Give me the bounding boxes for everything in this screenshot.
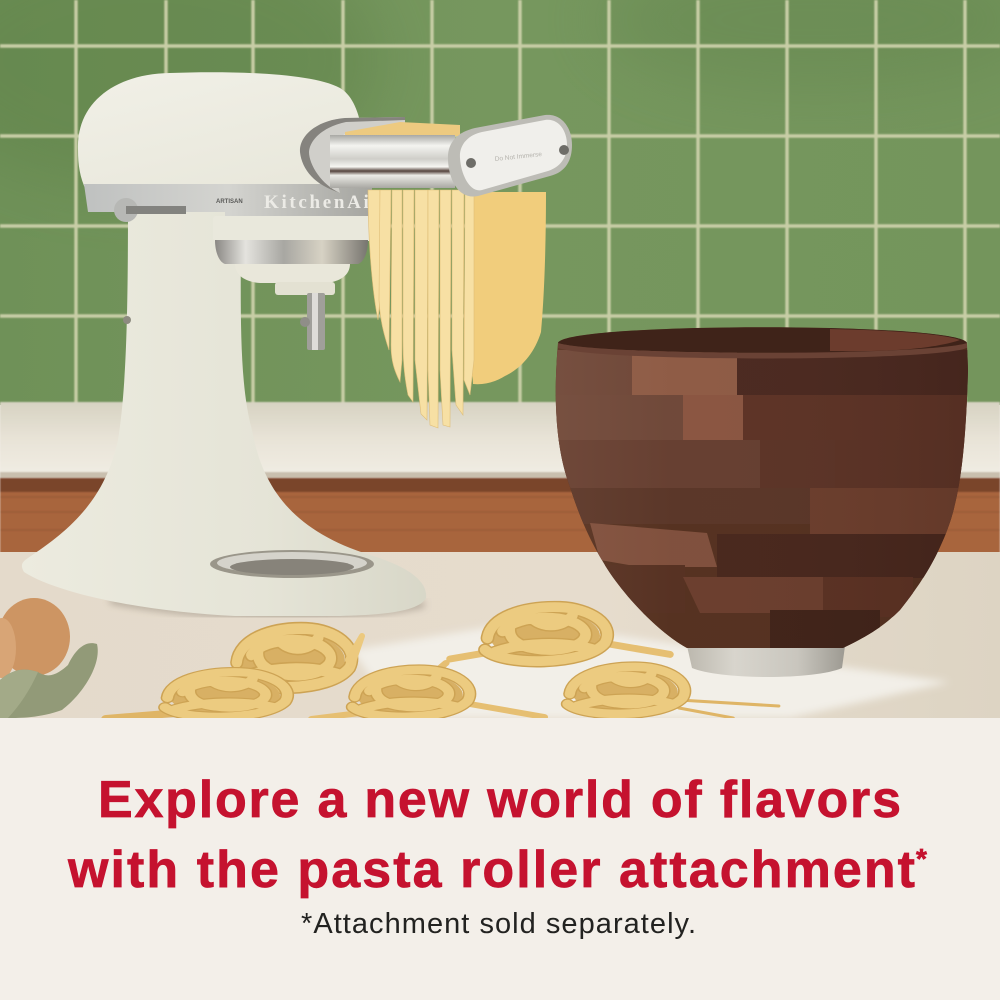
pasta strips bbox=[368, 190, 474, 428]
mixer shadow bbox=[110, 600, 424, 616]
egg bbox=[0, 598, 70, 676]
fresh pasta nests bbox=[106, 607, 779, 719]
nest: back left bbox=[234, 629, 352, 688]
model label: ARTISAN bbox=[216, 199, 243, 205]
bowl plate on base bbox=[210, 550, 374, 578]
green tile wall bbox=[0, 0, 1000, 405]
egg carton with eggs bbox=[0, 598, 98, 718]
marble countertop bbox=[0, 552, 1000, 718]
carton bbox=[0, 643, 98, 718]
headline: * bbox=[916, 843, 927, 874]
brand logo: KitchenAid bbox=[264, 192, 382, 213]
roller left cap bbox=[300, 117, 405, 193]
nest: front right bbox=[567, 667, 779, 718]
planetary hub bbox=[213, 216, 372, 350]
plate inscription: Do Not Immerse bbox=[494, 151, 543, 163]
mixer head bbox=[78, 72, 365, 190]
caption panel bbox=[0, 718, 1000, 1000]
nest: front left bbox=[106, 672, 287, 719]
headline bbox=[67, 771, 927, 899]
headline: with the pasta roller attachment bbox=[67, 841, 915, 899]
pasta ribbons bbox=[368, 190, 546, 428]
wooden cabinet bbox=[0, 478, 1000, 554]
footnote: *Attachment sold separately. bbox=[301, 908, 696, 940]
loose ribbon back left bbox=[348, 636, 362, 665]
mixer column and base bbox=[22, 205, 426, 616]
silver band bbox=[84, 184, 382, 222]
pasta sheet on roller bbox=[345, 122, 460, 136]
wood blocks bbox=[550, 350, 977, 653]
nest: front center bbox=[312, 663, 544, 719]
nest: top center bbox=[450, 607, 670, 661]
white back counter bbox=[0, 402, 1000, 478]
bowl rim and interior bbox=[558, 327, 967, 353]
roller right cap bbox=[448, 115, 572, 197]
bowl foot bbox=[687, 646, 845, 677]
wooden bowl bbox=[540, 320, 980, 677]
parchment and flour bbox=[352, 622, 950, 718]
photo: kitchen scene bbox=[0, 0, 1000, 719]
pasta roller attachment bbox=[300, 115, 572, 197]
headline: Explore a new world of flavors bbox=[98, 771, 901, 829]
roller barrel bbox=[330, 135, 455, 188]
pasta sheet bbox=[468, 192, 546, 384]
stand mixer bbox=[22, 72, 426, 616]
